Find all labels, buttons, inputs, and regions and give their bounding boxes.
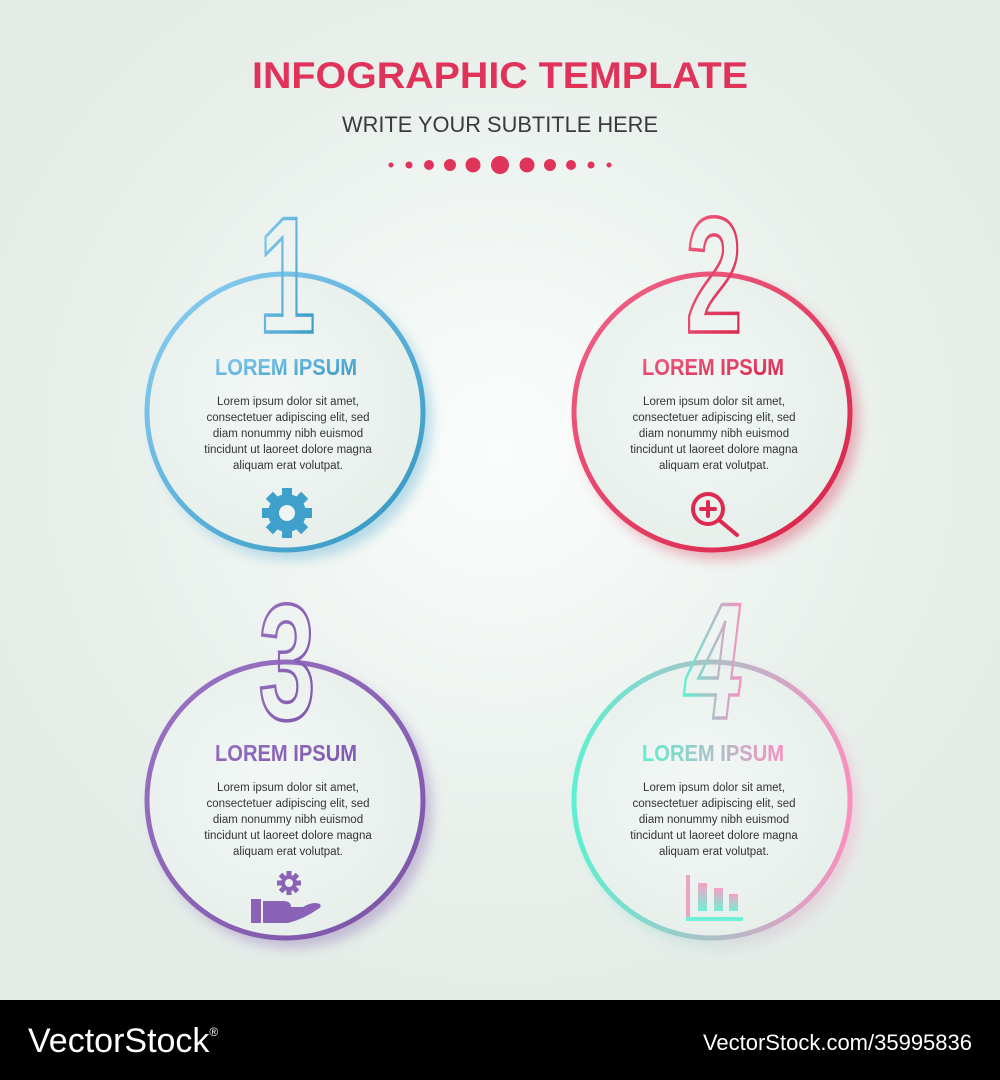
- subtitle: WRITE YOUR SUBTITLE HERE: [342, 112, 658, 137]
- panel 1: [147, 184, 432, 560]
- icon: magnifier plus: [693, 494, 737, 535]
- body text 1: Lorem ipsum dolor sit amet,: [217, 396, 359, 408]
- number 3: 3: [259, 571, 315, 755]
- heading 4: LOREM IPSUM: [642, 740, 784, 766]
- heading 1: LOREM IPSUM: [215, 354, 357, 380]
- body text 3: diam nonummy nibh euismod: [213, 814, 363, 826]
- icon: hand with gear: [251, 871, 321, 923]
- number 1: 1: [259, 184, 315, 368]
- icon: gear: [262, 488, 312, 538]
- body text 3: tincidunt ut laoreet dolore magna: [204, 830, 372, 842]
- panel 3: [147, 571, 432, 948]
- body text 2: Lorem ipsum dolor sit amet,: [643, 396, 785, 408]
- heading 2: LOREM IPSUM: [642, 354, 784, 380]
- body text 1: consectetuer adipiscing elit, sed: [206, 412, 370, 424]
- body text 4: aliquam erat volutpat.: [659, 846, 769, 858]
- footer band: VectorStock.com/35995836: [703, 1030, 972, 1055]
- body text 2: diam nonummy nibh euismod: [639, 428, 789, 440]
- body text 1: diam nonummy nibh euismod: [213, 428, 363, 440]
- body text 4: Lorem ipsum dolor sit amet,: [643, 782, 785, 794]
- body text 2: tincidunt ut laoreet dolore magna: [630, 444, 798, 456]
- footer band: ®: [209, 1025, 218, 1039]
- body text 4: consectetuer adipiscing elit, sed: [632, 798, 796, 810]
- heading 3: LOREM IPSUM: [215, 740, 357, 766]
- body text 3: consectetuer adipiscing elit, sed: [206, 798, 370, 810]
- number 2: 2: [686, 184, 742, 368]
- footer band: [0, 1000, 1000, 1080]
- body text 4: diam nonummy nibh euismod: [639, 814, 789, 826]
- panel 4: [574, 570, 859, 948]
- body text 1: aliquam erat volutpat.: [233, 460, 343, 472]
- body text 2: consectetuer adipiscing elit, sed: [632, 412, 796, 424]
- body text 3: aliquam erat volutpat.: [233, 846, 343, 858]
- body text 3: Lorem ipsum dolor sit amet,: [217, 782, 359, 794]
- panel 2: [574, 184, 859, 560]
- footer band: VectorStock: [28, 1022, 209, 1060]
- icon: bar chart: [686, 875, 743, 921]
- body text 4: tincidunt ut laoreet dolore magna: [630, 830, 798, 842]
- body text 2: aliquam erat volutpat.: [659, 460, 769, 472]
- number 4: 4: [683, 570, 742, 754]
- dots divider: [388, 156, 612, 174]
- title: INFOGRAPHIC TEMPLATE: [252, 55, 748, 96]
- body text 1: tincidunt ut laoreet dolore magna: [204, 444, 372, 456]
